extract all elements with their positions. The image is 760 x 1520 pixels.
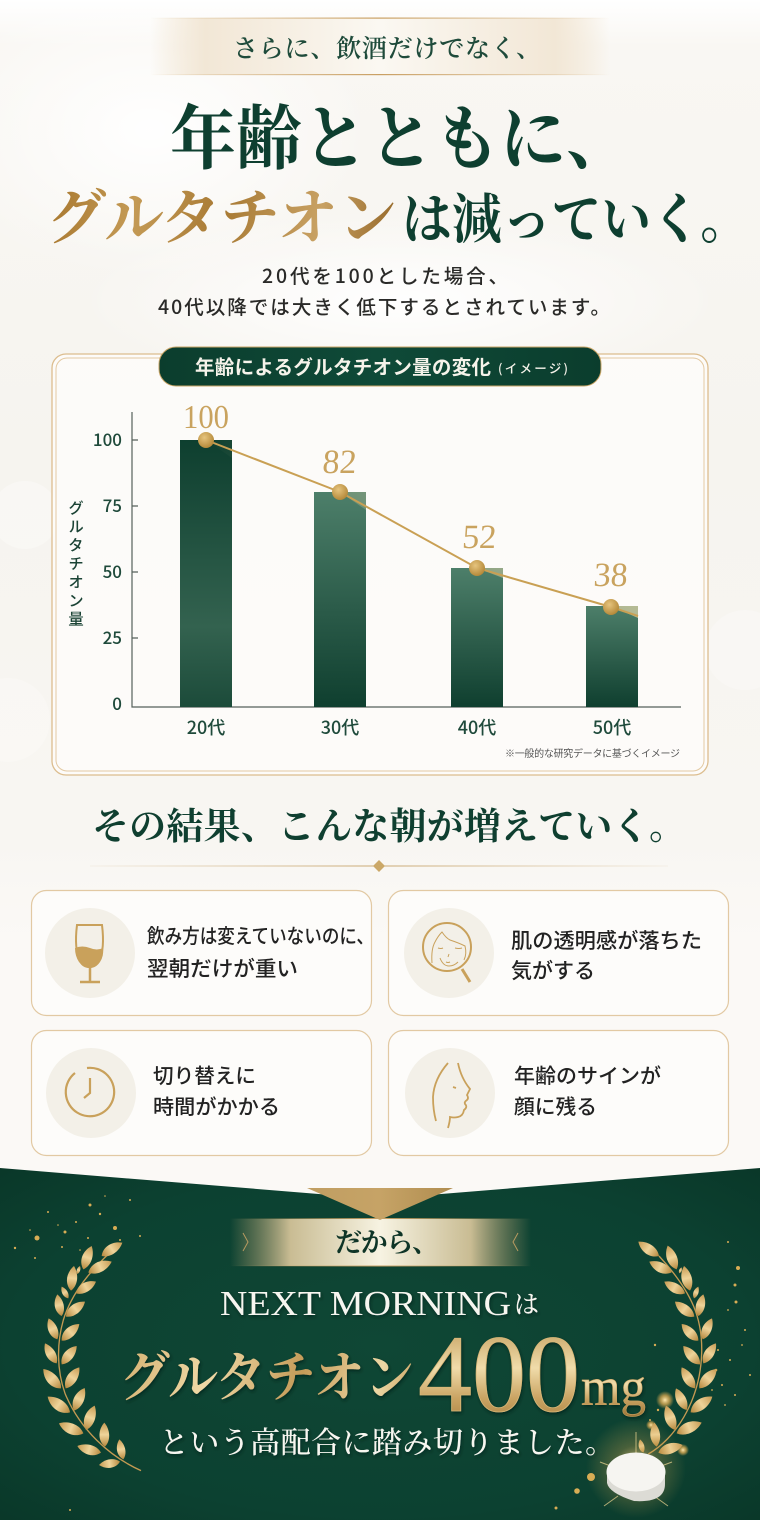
laurel: right: [635, 1238, 720, 1457]
icon: face in magnifier: [423, 923, 471, 982]
top ribbon: さらに、飲酒だけでなく、: [233, 29, 541, 65]
x labels: 30代: [321, 714, 359, 740]
headline: glutathione 400mg: 400: [418, 1313, 580, 1435]
values: 38: [592, 557, 629, 594]
x labels: [187, 714, 631, 740]
icon: triangle: [307, 1188, 453, 1220]
title: グルタチオン: [47, 171, 397, 257]
headline: glutathione 400mg: mg: [581, 1357, 646, 1417]
card: aging: 顔に残る: [514, 1090, 597, 1120]
icon: face profile: [433, 1063, 470, 1128]
title: 年齢とともに、: [170, 83, 632, 184]
values: [183, 399, 629, 594]
values: 82: [321, 444, 358, 481]
y axis ticks: 50: [103, 558, 122, 583]
card: drinking: [32, 890, 374, 1016]
headline: glutathione 400mg: グルタチオン: [120, 1335, 414, 1412]
panel frame: [52, 354, 708, 775]
headline: glutathione 400mg: [120, 1313, 646, 1435]
values: 100: [183, 399, 229, 436]
icon: tablet: [586, 1418, 686, 1518]
title: [47, 83, 750, 257]
laurel: left: [39, 1238, 141, 1471]
x labels: 40代: [458, 714, 496, 740]
y axis ticks: [93, 426, 122, 715]
dots: [198, 432, 619, 615]
card: switching: [32, 1030, 372, 1156]
y axis ticks: 0: [112, 690, 122, 715]
icon: wine glass: [75, 925, 103, 982]
subtitle: [158, 260, 610, 320]
closing text: という高配合に踏み切りました。: [159, 1418, 615, 1462]
panel: chart: [52, 347, 708, 775]
y axis ticks: 100: [93, 426, 122, 451]
heading: その結果、こんな朝が増えていく。: [92, 796, 686, 850]
subtitle: 40代以降では大きく低下するとされています。: [158, 291, 610, 320]
lead text: は: [514, 1285, 539, 1321]
y axis ticks: 25: [103, 624, 122, 649]
top ribbon: [150, 18, 610, 75]
card: aging: [388, 1030, 728, 1156]
card: switching: 時間がかかる: [153, 1090, 280, 1120]
x labels: 50代: [593, 714, 631, 740]
line: [206, 440, 638, 616]
icon: clock: [66, 1068, 114, 1116]
chart title pill: 年齢によるグルタチオン量の変化: [195, 351, 491, 380]
card: drinking: 飲み方は変えていないのに、: [147, 920, 374, 949]
chart title pill: [159, 347, 601, 386]
y axis label: グルタチオン量: [65, 500, 87, 630]
card: switching: 切り替えに: [153, 1059, 256, 1089]
card: skin: [388, 890, 728, 1016]
card: aging: 年齢のサインが: [514, 1059, 662, 1089]
card: drinking: 翌朝だけが重い: [147, 953, 298, 983]
values: 52: [461, 519, 498, 556]
panel: green section: [0, 1168, 760, 1520]
card: skin: 気がする: [511, 955, 595, 985]
x labels: 20代: [187, 714, 225, 740]
y axis ticks: 75: [103, 492, 122, 517]
subtitle: 20代を100とした場合、: [262, 260, 508, 289]
lead text: NEXT MORNING: [220, 1284, 511, 1323]
gold speckles: [14, 1195, 751, 1511]
axes: [132, 412, 681, 707]
ribbon: dakara: だから、: [335, 1221, 439, 1260]
chart title pill: (イメージ): [498, 358, 568, 377]
ribbon: dakara: [230, 1218, 531, 1266]
footnote: ※一般的な研究データに基づくイメージ: [505, 745, 680, 760]
card: skin: 肌の透明感が落ちた: [511, 925, 702, 955]
bars: [180, 440, 638, 707]
